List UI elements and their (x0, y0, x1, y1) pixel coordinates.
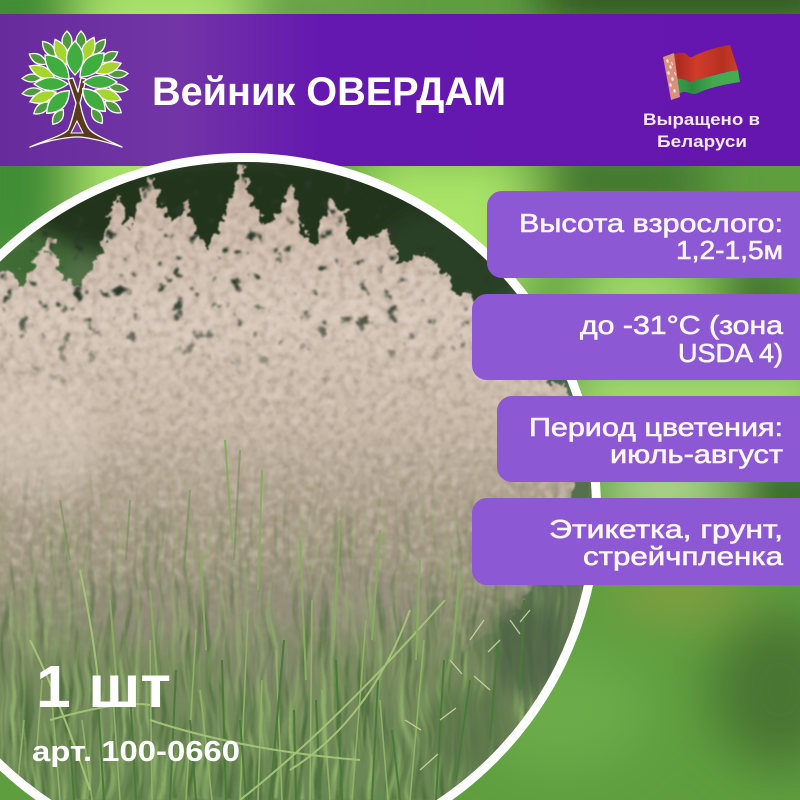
origin caption (643, 110, 760, 151)
tree roots and trunk (30, 78, 122, 147)
grass streak texture (0, 462, 583, 800)
origin caption: Выращено в (643, 110, 760, 129)
card: flowering period: Период цветения: (529, 412, 783, 442)
title: Вейник ОВЕРДАМ (152, 70, 506, 114)
photo circle with grass (0, 150, 610, 800)
large mid-green leaves (34, 41, 117, 119)
icon: Belarus flag (663, 45, 740, 100)
card: flowering period (497, 396, 800, 482)
logo: tree (21, 31, 129, 147)
mauve flower haze (142, 577, 406, 687)
origin caption: Беларуси (657, 132, 747, 151)
plume mass (0, 164, 576, 656)
quantity label: 1 шт (36, 654, 171, 720)
card: flowering period: июль-август (610, 439, 783, 469)
card: height (487, 191, 800, 278)
card: hardiness (472, 294, 800, 380)
article number: арт. 100-0660 (32, 736, 240, 768)
outer dark leaves (21, 31, 129, 127)
card: hardiness: USDA 4) (678, 338, 783, 368)
dark gaps between plumes (0, 176, 514, 395)
card: hardiness: до -31°C (зона (580, 310, 784, 340)
card: height: 1,2-1,5м (676, 235, 783, 265)
card: height: Высота взрослого: (519, 208, 783, 238)
white ring (0, 153, 601, 800)
right lower dark region (426, 600, 572, 776)
dark foliage behind plumes (0, 150, 580, 400)
lower grass field (0, 578, 584, 800)
lime leaves (27, 35, 123, 107)
header band (0, 14, 800, 166)
card: package contents: Этикетка, грунт, (549, 514, 783, 544)
card: package contents (472, 498, 800, 585)
grass blades (16, 440, 530, 800)
bright left plume glow (0, 380, 100, 500)
card: package contents: стрейчпленка (583, 541, 784, 571)
